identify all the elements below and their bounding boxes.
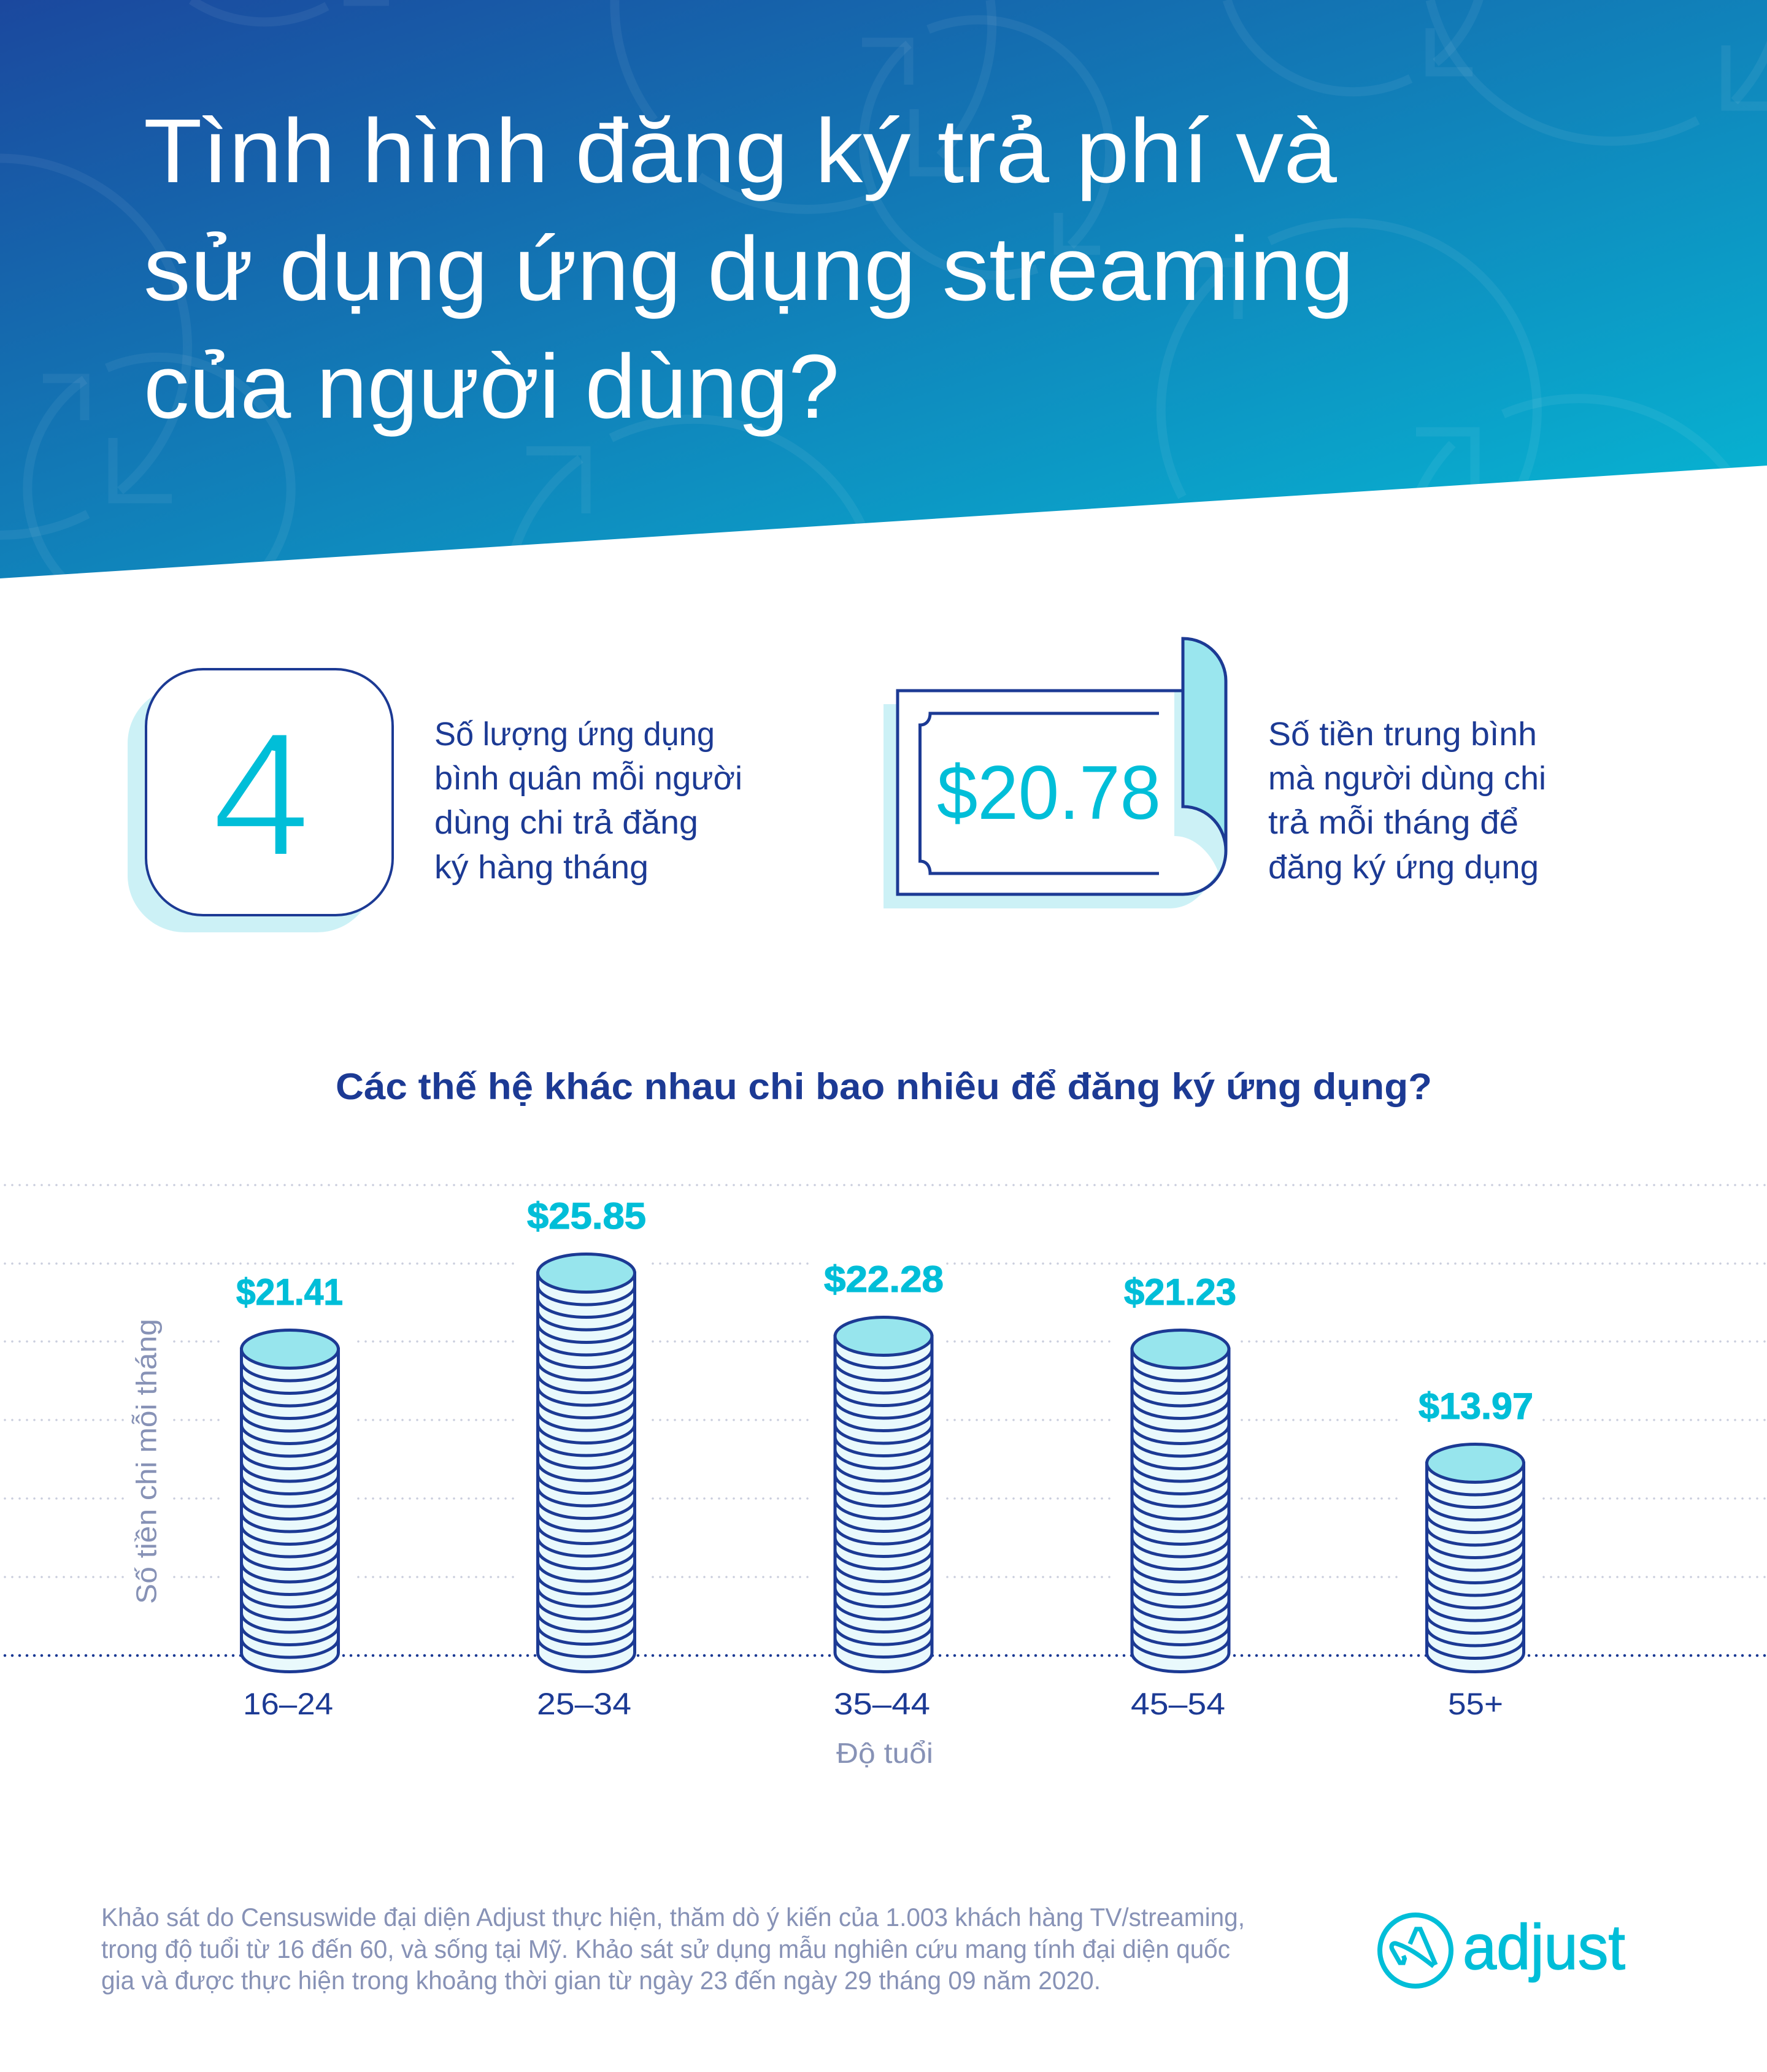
text: spend description: trả mỗi tháng để [1268, 804, 1519, 841]
bar: 16-24: 16–24 [243, 1687, 333, 1721]
bar chart: spend by age group [5, 1185, 1767, 1769]
y axis label: Số tiền chi mỗi tháng [130, 1319, 162, 1604]
x axis label: Độ tuổi [836, 1737, 933, 1769]
bar: 25-34: $25.85 [527, 1195, 646, 1237]
bar: 55+: 55+ [1448, 1687, 1503, 1721]
header banner [0, 0, 1767, 578]
logo: adjust [1380, 1912, 1625, 1986]
icon: rounded square with number 4 [128, 669, 393, 932]
title: của người dùng? [144, 336, 839, 437]
bar: 16-24: $21.41 [236, 1272, 343, 1313]
text: number description: dùng chi trả đăng [434, 804, 698, 841]
footnote: Khảo sát do Censuswide đại diện Adjust thực hiện, thăm dò ý kiến của 1.003 khách hàng TV/streaming, [101, 1903, 1245, 1932]
footnote: gia và được thực hiện trong khoảng thời gian từ ngày 23 đến ngày 29 tháng 09 năm 2020. [101, 1966, 1101, 1995]
bar: 55+: $13.97 [1419, 1386, 1533, 1427]
icon: rounded square with number 4: 4 [212, 695, 310, 894]
bar: 45-54 [1124, 1272, 1236, 1721]
bar: 25-34: 25–34 [537, 1687, 631, 1721]
text: number description [434, 716, 742, 886]
footnote [101, 1903, 1245, 1995]
panel: average number of subscriptions [128, 669, 742, 932]
text: spend description [1268, 716, 1546, 886]
text: number description: Số lượng ứng dụng [434, 716, 715, 753]
bar: 55+ [1419, 1386, 1533, 1721]
icon: ticket with amount: $20.78 [937, 751, 1161, 835]
bar: 25-34 [527, 1195, 646, 1721]
icon: adjust mark [1380, 1915, 1451, 1986]
panel: average monthly spend [884, 639, 1546, 908]
text: spend description: Số tiền trung bình [1268, 716, 1537, 753]
bar: 35-44: 35–44 [834, 1687, 930, 1721]
text: spend description: đăng ký ứng dụng [1268, 849, 1539, 886]
text: number description: bình quân mỗi người [434, 760, 742, 797]
text: number description: ký hàng tháng [434, 849, 649, 886]
bar: 35-44 [824, 1259, 944, 1721]
footnote: trong độ tuổi từ 16 đến 60, và sống tại Mỹ. Khảo sát sử dụng mẫu nghiên cứu mang tính đại diện quốc [101, 1935, 1230, 1963]
bar: 45-54: 45–54 [1131, 1687, 1225, 1721]
title: sử dụng ứng dụng streaming [144, 218, 1354, 320]
title [144, 101, 1354, 437]
title: Tình hình đăng ký trả phí và [144, 101, 1338, 202]
bar: 16-24 [236, 1272, 343, 1721]
bar: 45-54: $21.23 [1124, 1272, 1236, 1313]
bar: 35-44: $22.28 [824, 1259, 944, 1300]
icon: ticket with amount [884, 639, 1226, 908]
text: spend description: mà người dùng chi [1268, 760, 1546, 797]
logo: adjust: adjust [1463, 1912, 1625, 1983]
chart heading: Các thế hệ khác nhau chi bao nhiêu để đăng ký ứng dụng? [336, 1066, 1432, 1107]
